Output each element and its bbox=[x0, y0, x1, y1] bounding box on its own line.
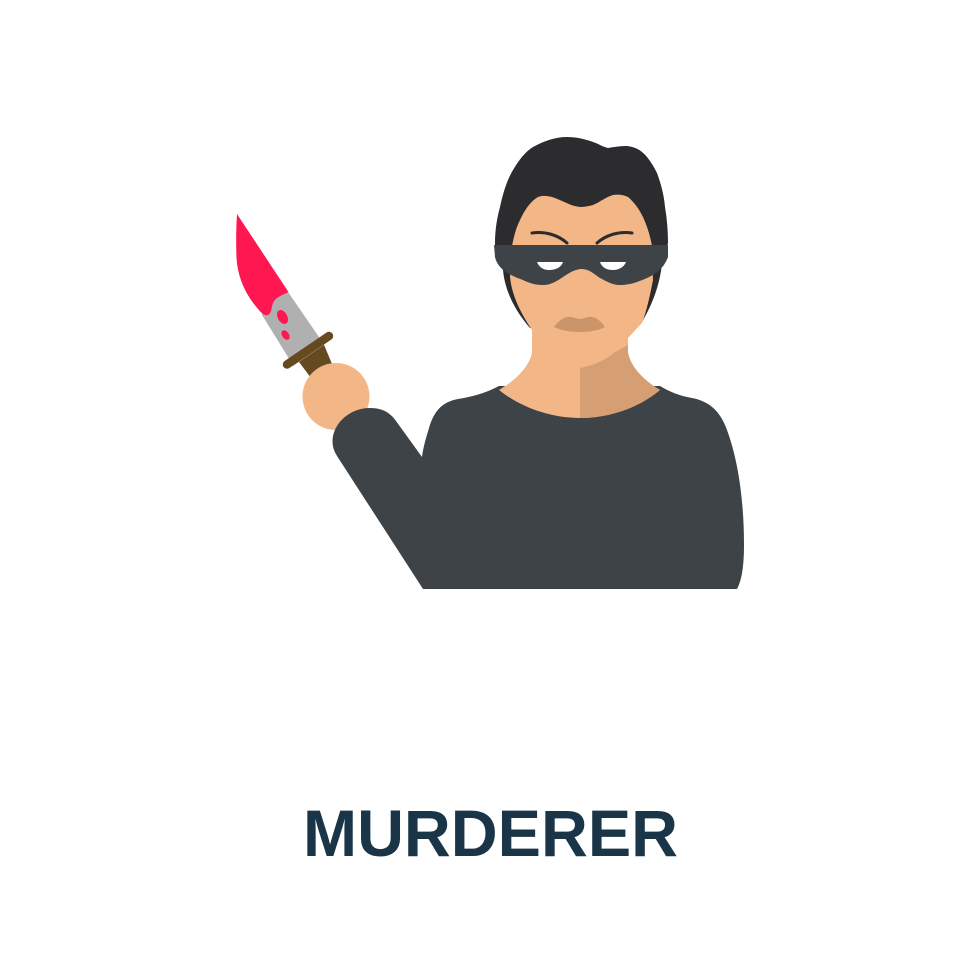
mask bbox=[494, 245, 668, 285]
neck shadow bbox=[580, 336, 660, 418]
face bbox=[510, 195, 653, 367]
illustration: masked murderer figure bbox=[236, 137, 744, 589]
title: MURDERER bbox=[303, 796, 678, 870]
knife guard bbox=[287, 336, 329, 364]
blood drops bbox=[275, 308, 291, 341]
icon: hand bbox=[302, 363, 370, 430]
knife blade blood bbox=[236, 214, 288, 315]
mouth bbox=[554, 317, 605, 332]
body in dark sweater bbox=[332, 386, 744, 589]
eyebrows bbox=[532, 232, 632, 243]
knife blade steel bbox=[262, 292, 324, 366]
neck and collar bbox=[499, 320, 660, 418]
icon: knife bbox=[236, 214, 332, 378]
knife handle bbox=[296, 340, 332, 378]
mask eyes bbox=[537, 262, 626, 270]
hair bbox=[495, 137, 668, 328]
